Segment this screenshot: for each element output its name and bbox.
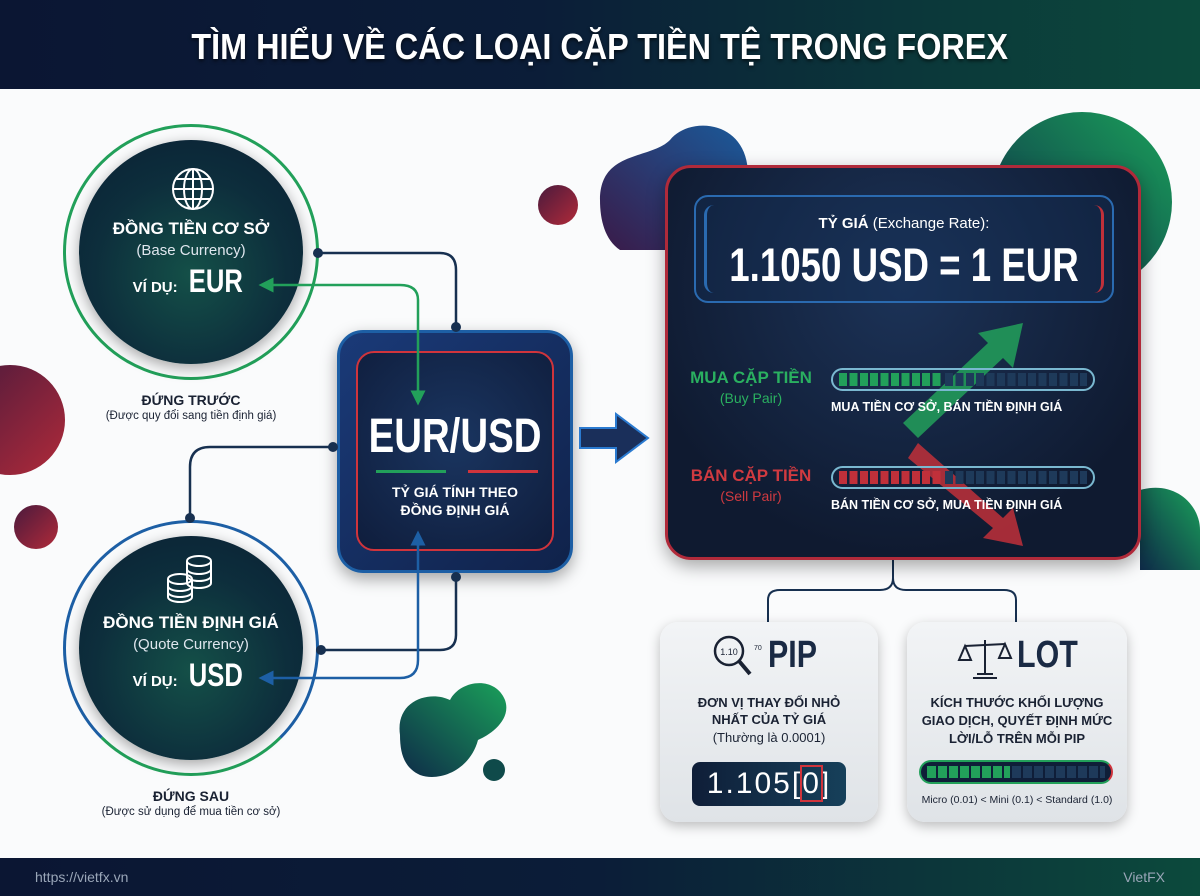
buy row: (Buy Pair) (720, 390, 782, 406)
label: đứng trước: (Được quy đổi sang tiền định giá) (106, 410, 276, 422)
card: PIP: NHẤT CỦA TỶ GIÁ (712, 712, 826, 727)
panel: EUR/USD center box (337, 330, 573, 573)
text: quote currency: USD (189, 657, 243, 693)
lot bar (919, 760, 1113, 784)
label: đứng sau: ĐỨNG SAU (153, 788, 229, 804)
buy row: MUA CẶP TIỀN (690, 368, 812, 387)
footer: VietFX (1123, 869, 1165, 885)
pip display: 1.105[0] (707, 767, 831, 800)
sell row: (Sell Pair) (720, 488, 782, 504)
card: LOT: KÍCH THƯỚC KHỐI LƯỢNG (930, 695, 1104, 710)
header (0, 0, 1200, 89)
panel: quote currency circle (63, 520, 319, 776)
arrows: buy/sell (903, 323, 1023, 546)
icon: magnifier (714, 636, 762, 676)
text: quote currency: ĐỒNG TIỀN ĐỊNH GIÁ (103, 613, 279, 632)
panel: exchange rate: BÁN TIỀN CƠ SỞ, MUA TIỀN ĐỊNH GIÁ (831, 498, 1062, 512)
card: LOT (907, 622, 1127, 822)
panel: EUR/USD center box: TỶ GIÁ TÍNH THEO (392, 484, 518, 500)
rate box: 1.1050 USD = 1 EUR (729, 238, 1079, 291)
panel: EUR/USD center box: ĐỒNG ĐỊNH GIÁ (401, 502, 509, 518)
text: base currency: ĐỒNG TIỀN CƠ SỞ (113, 219, 269, 238)
label: đứng sau (102, 788, 280, 818)
text: base currency: EUR (189, 263, 243, 299)
text: base currency (112, 219, 270, 299)
buy row (690, 368, 812, 406)
text: quote currency: (Quote Currency) (133, 636, 249, 653)
icon: globe (172, 168, 214, 210)
text: quote currency: VÍ DỤ: (133, 673, 178, 690)
rate box (694, 195, 1114, 303)
panel: exchange rate (665, 165, 1141, 560)
footer: https://vietfx.vn (35, 869, 128, 885)
card: PIP: ĐƠN VỊ THAY ĐỔI NHỎ (698, 695, 840, 710)
panel: exchange rate: MUA TIỀN CƠ SỞ, BÁN TIỀN ĐỊNH GIÁ (831, 400, 1062, 414)
label: đứng sau: (Được sử dụng để mua tiền cơ sở) (102, 806, 280, 818)
card: LOT: LỜI/LỖ TRÊN MỖI PIP (949, 731, 1085, 746)
card: LOT: Micro (0.01) < Mini (0.1) < Standard (1.0) (922, 794, 1112, 806)
icon: scales (958, 640, 1012, 679)
text: base currency: (Base Currency) (136, 242, 246, 259)
title: TÌM HIỂU VỀ CÁC LOẠI CẶP TIỀN TỆ TRONG FOREX (192, 26, 1008, 67)
text: base currency: VÍ DỤ: (133, 279, 178, 296)
sell row: BÁN CẶP TIỀN (691, 466, 811, 485)
title: PIP: PIP (768, 634, 817, 676)
arrow: center to panel (579, 412, 650, 464)
icon: coins (167, 555, 212, 603)
text: quote currency (103, 613, 279, 693)
label: đứng trước: ĐỨNG TRƯỚC (142, 392, 240, 408)
sell row (691, 466, 811, 504)
icon: magnifier: 70 (754, 645, 762, 652)
rate box: TỶ GIÁ (Exchange Rate): (819, 215, 989, 232)
pip display (692, 762, 846, 806)
title: LOT: LOT (1017, 634, 1078, 676)
footer (0, 858, 1200, 896)
card: LOT: GIAO DỊCH, QUYẾT ĐỊNH MỨC (922, 713, 1112, 728)
icon: magnifier: 1.10 (720, 647, 738, 657)
text: EUR/USD: EUR/USD (369, 410, 541, 463)
card: PIP (660, 622, 878, 822)
label: đứng trước (106, 392, 276, 422)
panel: base currency circle (63, 124, 319, 380)
card: PIP: (Thường là 0.0001) (713, 730, 825, 745)
